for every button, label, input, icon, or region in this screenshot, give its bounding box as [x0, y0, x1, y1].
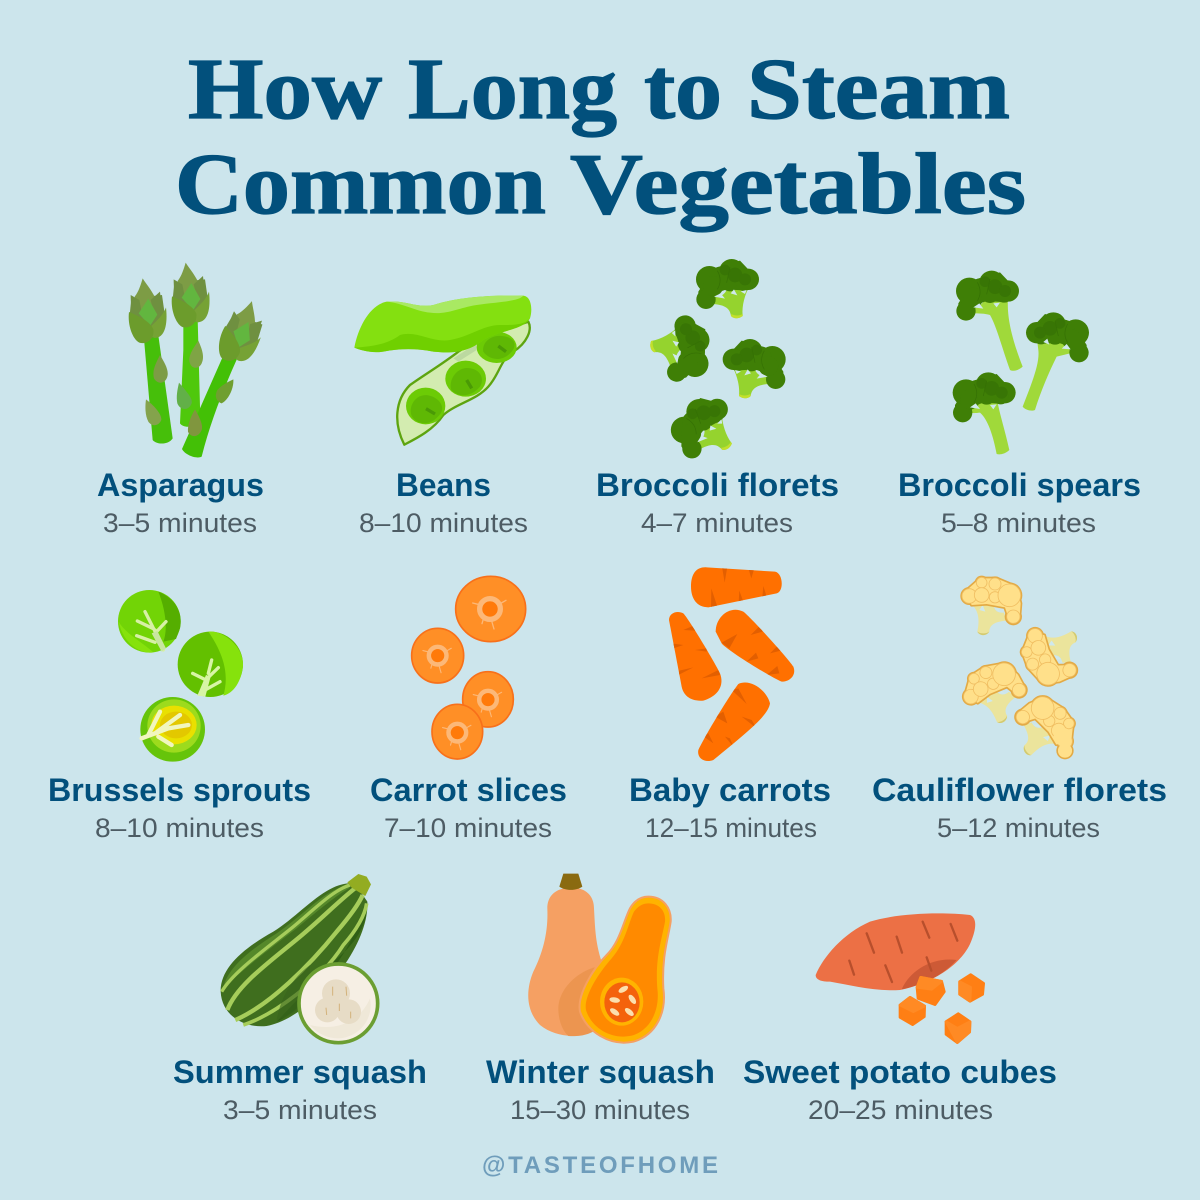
label: broccoli spears: Broccoli spears — [898, 467, 1141, 503]
icon: broccoli spears — [953, 271, 1089, 454]
label: beans: 8–10 minutes — [359, 508, 528, 538]
label: carrot slices: 7–10 minutes — [384, 813, 552, 843]
icon: brussels sprouts — [118, 590, 243, 762]
label: beans — [359, 467, 528, 538]
label: brussels sprouts: 8–10 minutes — [95, 813, 264, 843]
title: How — [188, 40, 382, 137]
footer handle: @TASTEOFHOME — [482, 1152, 718, 1179]
label: broccoli florets: Broccoli florets — [596, 467, 839, 503]
label: cauliflower florets — [872, 772, 1167, 843]
title — [175, 40, 1026, 232]
icon: summer squash — [221, 874, 378, 1043]
label: summer squash — [173, 1054, 427, 1125]
label: broccoli florets: 4–7 minutes — [641, 508, 793, 538]
label: sweet potato cubes: 20–25 minutes — [808, 1095, 993, 1125]
title: Common — [175, 135, 546, 232]
label: winter squash: Winter squash — [486, 1054, 715, 1090]
label: cauliflower florets: Cauliflower florets — [872, 772, 1167, 808]
label: cauliflower florets: 5–12 minutes — [937, 813, 1100, 843]
label: baby carrots: 12–15 minutes — [645, 813, 817, 843]
label: summer squash: 3–5 minutes — [223, 1095, 377, 1125]
label: brussels sprouts — [48, 772, 311, 843]
label: carrot slices — [370, 772, 567, 843]
label: broccoli spears — [898, 467, 1141, 538]
icon: beans — [354, 296, 531, 445]
label: asparagus — [97, 467, 264, 538]
label: brussels sprouts: Brussels sprouts — [48, 772, 311, 808]
label: winter squash: 15–30 minutes — [510, 1095, 690, 1125]
title: Steam — [747, 40, 1010, 137]
label: baby carrots — [629, 772, 831, 843]
label: sweet potato cubes: Sweet potato cubes — [743, 1054, 1057, 1090]
title: Long — [408, 40, 617, 137]
icon: asparagus — [129, 263, 274, 457]
label: broccoli spears: 5–8 minutes — [941, 508, 1096, 538]
label: carrot slices: Carrot slices — [370, 772, 567, 808]
title: Vegetables — [570, 135, 1026, 232]
label: winter squash — [486, 1054, 715, 1125]
label: baby carrots: Baby carrots — [629, 772, 831, 808]
icon: carrot slices — [412, 576, 526, 759]
icon: sweet potato cubes — [816, 913, 984, 1043]
label: summer squash: Summer squash — [173, 1054, 427, 1090]
icon: broccoli florets — [645, 259, 786, 470]
title: to — [644, 40, 722, 137]
label: asparagus: 3–5 minutes — [103, 508, 257, 538]
label: broccoli florets — [596, 467, 839, 538]
icon: cauliflower florets — [952, 576, 1090, 771]
label: sweet potato cubes — [743, 1054, 1057, 1125]
icon: winter squash — [528, 874, 671, 1043]
icon: baby carrots — [669, 567, 794, 761]
label: beans: Beans — [396, 467, 491, 503]
label: asparagus: Asparagus — [97, 467, 264, 503]
